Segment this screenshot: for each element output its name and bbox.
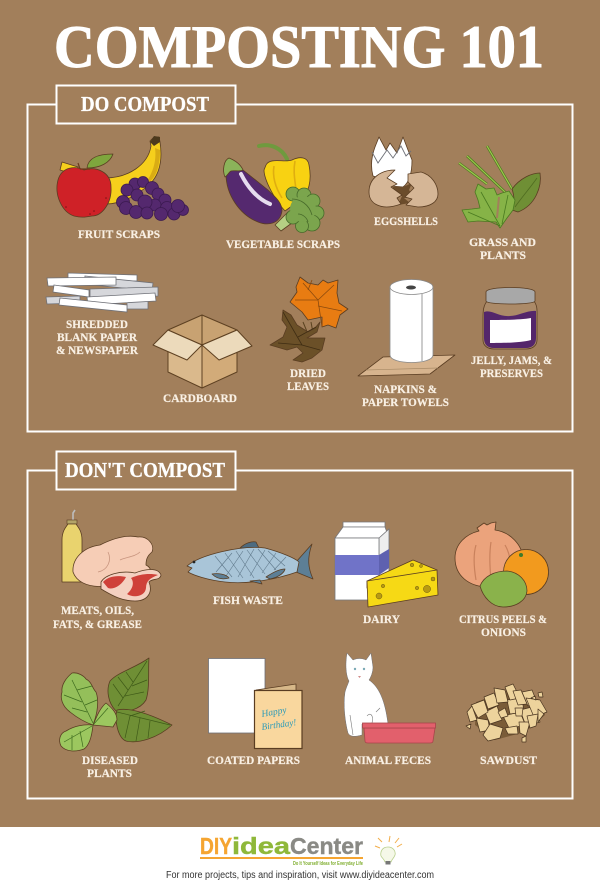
heading: do compost: DO COMPOST <box>81 92 209 116</box>
label: shredded paper: BLANK PAPER <box>57 330 137 344</box>
label: sawdust: SAWDUST <box>480 753 537 767</box>
label: diseased plants: DISEASED <box>82 753 138 767</box>
heading: do compost <box>56 86 236 124</box>
icon: coated papers: Happy <box>260 706 288 720</box>
label: napkins and paper towels: NAPKINS & <box>374 382 437 396</box>
label: cardboard: CARDBOARD <box>163 391 237 405</box>
label: meats oils fats grease: MEATS, OILS, <box>61 603 134 617</box>
icon: cat with litter box <box>344 653 436 743</box>
label: animal feces: ANIMAL FECES <box>345 753 431 767</box>
icon: coated papers <box>208 658 302 748</box>
label: diseased plants: PLANTS <box>87 766 132 780</box>
icon: fruit <box>57 136 189 220</box>
label: citrus peels and onions <box>459 612 547 639</box>
label: grass and plants: GRASS AND <box>469 235 536 249</box>
icon: dried leaves <box>270 277 348 362</box>
logo underline <box>200 857 363 859</box>
footer text: For more projects, tips and inspiration, visit www.diyideacenter.com <box>166 870 434 881</box>
heading: don't compost: DON'T COMPOST <box>65 458 225 482</box>
icon: grass and plants <box>459 146 540 228</box>
title: COMPOSTING 101 <box>54 14 544 80</box>
logo wordmark <box>200 833 363 859</box>
icon: eggshells <box>369 137 438 207</box>
label: meats oils fats grease <box>53 603 142 631</box>
panel frame <box>28 104 572 432</box>
label: fruit scraps: FRUIT SCRAPS <box>78 227 160 241</box>
icon: light bulb <box>375 836 402 864</box>
logo wordmark: DIY <box>200 833 232 859</box>
label: dried leaves: LEAVES <box>287 379 329 393</box>
logo wordmark: Center <box>290 833 363 859</box>
label: dried leaves <box>287 366 329 393</box>
panel: do compost <box>28 86 572 432</box>
icon: citrus and onion <box>455 522 548 607</box>
footer <box>0 827 600 892</box>
icon: jam jar <box>483 288 537 349</box>
logo wordmark: idea <box>232 833 290 859</box>
label: meats oils fats grease: FATS, & GREASE <box>53 617 142 631</box>
label: napkins and paper towels <box>362 382 449 409</box>
icon: diseased plants <box>60 658 172 751</box>
label: jelly jams preserves: JELLY, JAMS, & <box>471 353 552 367</box>
icon: cardboard box <box>153 315 252 388</box>
label: dairy: DAIRY <box>363 612 400 626</box>
label: grass and plants: PLANTS <box>480 248 526 262</box>
panel frame <box>28 470 572 798</box>
label: fish waste: FISH WASTE <box>213 593 283 607</box>
logo tagline: Do It Yourself Ideas for Everyday Life <box>293 861 363 867</box>
label: shredded paper: SHREDDED <box>66 317 128 331</box>
label: jelly jams preserves <box>471 353 552 380</box>
label: napkins and paper towels: PAPER TOWELS <box>362 395 449 409</box>
icon: dairy <box>335 522 438 607</box>
icon: meats oils fats <box>62 510 161 601</box>
label: vegetable scraps: VEGETABLE SCRAPS <box>226 237 340 251</box>
icon: vegetables <box>224 145 324 232</box>
label: coated papers: COATED PAPERS <box>207 753 300 767</box>
label: citrus peels and onions: CITRUS PEELS & <box>459 612 547 626</box>
label: dried leaves: DRIED <box>290 366 326 380</box>
icon: paper towel roll <box>358 280 455 376</box>
label: shredded paper <box>56 317 138 357</box>
heading: don't compost <box>56 452 236 490</box>
icon: coated papers: Birthday! <box>261 718 297 733</box>
label: grass and plants <box>469 235 536 262</box>
label: citrus peels and onions: ONIONS <box>481 625 526 639</box>
panel: don't compost <box>28 452 572 798</box>
icon: sawdust <box>466 684 547 742</box>
label: eggshells: EGGSHELLS <box>374 214 438 228</box>
icon: shredded paper <box>46 273 158 312</box>
label: shredded paper: & NEWSPAPER <box>56 343 138 357</box>
label: diseased plants <box>82 753 138 780</box>
icon: fish <box>187 542 313 584</box>
label: jelly jams preserves: PRESERVES <box>480 366 543 380</box>
